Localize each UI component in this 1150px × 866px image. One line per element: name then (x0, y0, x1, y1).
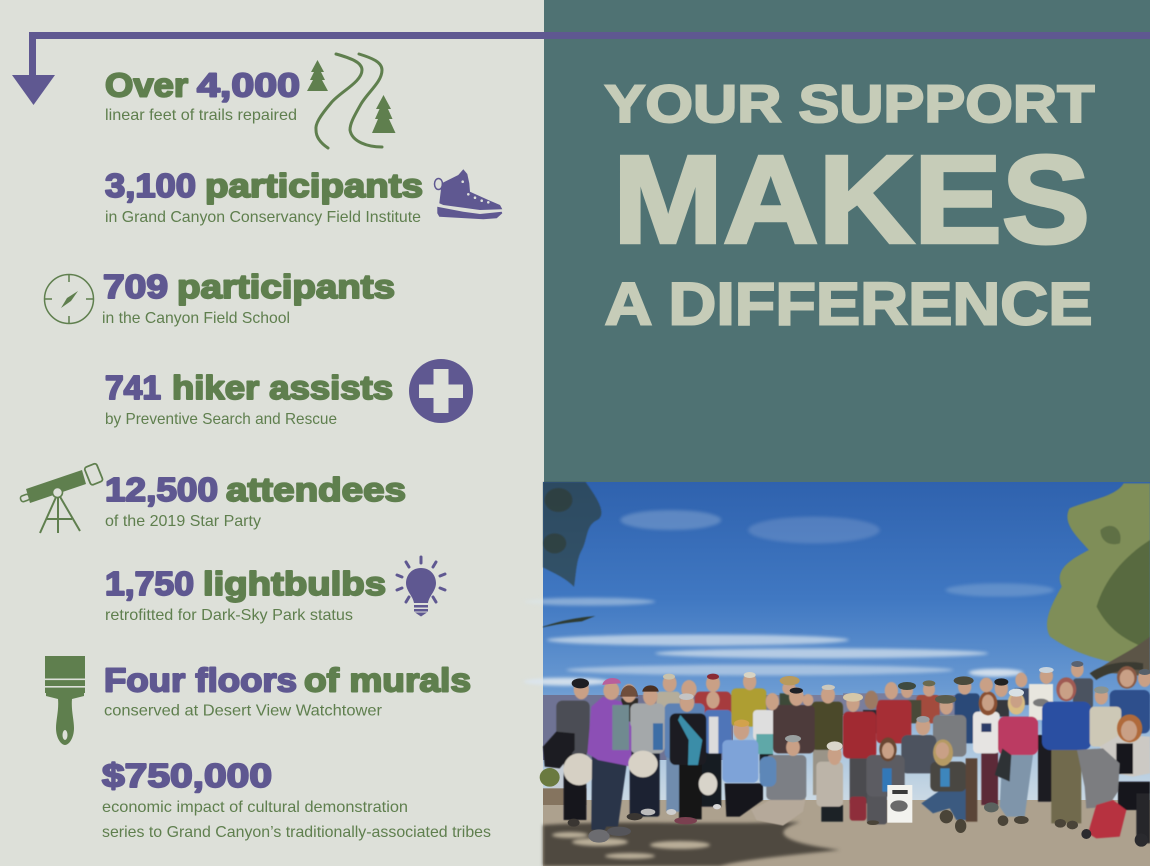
stat: canyon field school: 709 (103, 268, 168, 305)
icon: lightbulb (397, 557, 445, 616)
seated woman (1118, 782, 1150, 810)
icon: winding trail and pine trees (307, 54, 396, 148)
woman with poster (850, 797, 866, 821)
man in grey jacket (564, 752, 586, 820)
left panel background (0, 0, 544, 866)
stat: field institute participants (105, 167, 423, 226)
stat: cultural demonstration economic impact: economic impact of cultural demonstration (102, 799, 408, 816)
stat: cultural demonstration economic impact (102, 757, 491, 841)
stat: star party attendees (105, 471, 406, 530)
stat: canyon field school: in the Canyon Field School (102, 310, 290, 327)
stat: canyon field school: participants (177, 268, 395, 305)
poster (887, 785, 912, 823)
hats and hair (572, 672, 843, 751)
shoes (568, 804, 721, 843)
back row (1090, 662, 1143, 680)
sky and trees (524, 482, 1150, 815)
stat: star party attendees: attendees (226, 471, 406, 508)
stat: hiker assists: 741 (105, 369, 161, 406)
stat: trails repaired: 4,000 (197, 66, 300, 104)
tree: right (1047, 483, 1150, 677)
red sweaters (850, 755, 870, 803)
title (604, 75, 1094, 338)
back rows (621, 698, 638, 722)
stat: star party attendees: 12,500 (105, 471, 218, 508)
faces (574, 673, 842, 765)
title line: a difference: A DIFFERENCE (604, 270, 1092, 338)
woman in black (679, 760, 702, 819)
stat: dark-sky lightbulbs: 1,750 (105, 565, 194, 602)
purple woman (591, 755, 628, 830)
stat: trails repaired (105, 66, 300, 124)
purple arrow from the title panel (12, 32, 1150, 105)
stat: cultural demonstration economic impact: $750,000 (102, 757, 272, 794)
pink woman (1000, 755, 1033, 817)
icon: first aid cross (409, 359, 473, 423)
title line: your support: YOUR SUPPORT (604, 75, 1094, 134)
crouching woman (751, 797, 806, 826)
people: right half (843, 661, 1150, 847)
stat: watchtower murals: conserved at Desert View Watchtower (104, 702, 383, 720)
title line: makes: MAKES (613, 130, 1090, 270)
stat: dark-sky lightbulbs (105, 565, 386, 624)
stat: trails repaired: linear feet of trails repaired (105, 107, 297, 124)
grey jacket (933, 715, 966, 757)
stat: canyon field school (102, 268, 395, 327)
stat: trails repaired: Over (105, 66, 188, 104)
icon: telescope (20, 463, 103, 533)
photo: group portrait at the Grand Canyon rim (524, 482, 1150, 866)
walker wheels (1081, 829, 1148, 847)
blue puffer (1051, 748, 1081, 823)
blonde woman (921, 787, 967, 820)
people: left half (540, 672, 843, 843)
vest and navy (1110, 690, 1150, 733)
stat: field institute participants: participants (205, 167, 423, 204)
boots (867, 802, 1078, 833)
icon: compass (44, 274, 94, 324)
hats (843, 661, 1150, 723)
stat: watchtower murals: Four floors (104, 662, 297, 698)
stat: watchtower murals: of murals (304, 662, 471, 698)
right panel: teal title background (544, 0, 1150, 483)
canyon horizon (543, 695, 973, 715)
stat: field institute participants: 3,100 (105, 167, 196, 204)
woman in white (981, 752, 998, 805)
stat: watchtower murals (104, 662, 471, 720)
stat: hiker assists (105, 369, 393, 428)
stat: field institute participants: in Grand Canyon Conservancy Field Institute (105, 209, 421, 226)
icon: paint brush (45, 656, 85, 745)
beige woman (821, 805, 843, 822)
canyon walls (543, 695, 733, 760)
stat: hiker assists: hiker assists (172, 369, 393, 406)
walker (1136, 793, 1150, 843)
rim ground with dappled shade (543, 800, 1150, 866)
faces (846, 661, 1150, 766)
stat: dark-sky lightbulbs: lightbulbs (203, 565, 386, 602)
stat: cultural demonstration economic impact: series to Grand Canyon’s traditionally-associated tribes (102, 824, 491, 841)
stat: hiker assists: by Preventive Search and Rescue (105, 411, 337, 428)
poster at back (1029, 684, 1053, 720)
icon: hiking boot (434, 169, 502, 219)
tree: left (543, 482, 601, 627)
kneeling woman (725, 783, 763, 817)
stat: dark-sky lightbulbs: retrofitted for Dark-Sky Park status (105, 607, 353, 624)
stat: star party attendees: of the 2019 Star Party (105, 513, 261, 530)
